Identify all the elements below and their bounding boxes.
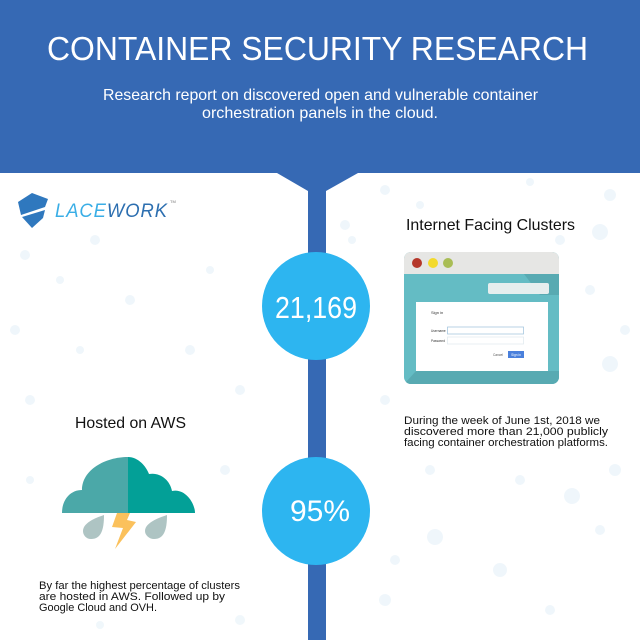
illustration: login window: [404, 252, 559, 384]
window buttons: [412, 258, 453, 268]
text: internet facing description: [404, 415, 609, 449]
subtitle: orchestration panels in the cloud.: [202, 105, 438, 122]
stat circle: 95%: [262, 457, 370, 565]
title: CONTAINER SECURITY RESEARCH: [47, 30, 588, 67]
text: AWS description: By far the highest percentage of clusters: [39, 580, 241, 592]
stat circle: 21,169: 21,169: [275, 290, 357, 325]
sign-in form: Sign in: [511, 353, 521, 357]
subtitle: [103, 87, 539, 122]
subtitle: Research report on discovered open and vulnerable container: [103, 87, 539, 104]
sign-in form: Password: [431, 339, 445, 343]
heading: Hosted on AWS: Hosted on AWS: [75, 415, 186, 432]
logo: Lacework: TM: [170, 199, 176, 204]
text: AWS description: Google Cloud and OVH.: [39, 602, 157, 614]
text: internet facing description: discovered more than 21,000 publicly: [404, 426, 609, 438]
sign-in form: Cancel: [493, 353, 503, 357]
stat circle: 21,169: [262, 252, 370, 360]
timeline stem: [308, 185, 326, 640]
stat circle: 95%: 95%: [290, 495, 350, 528]
sign-in form: Username: [431, 329, 446, 333]
sign-in form: Sign in: [431, 310, 443, 315]
text: internet facing description: During the week of June 1st, 2018 we: [404, 415, 600, 427]
icon: shield: [18, 193, 48, 228]
text: AWS description: [39, 580, 241, 614]
heading: Internet Facing Clusters: Internet Facing Clusters: [406, 217, 575, 234]
raindrops: [83, 515, 167, 539]
logo: Lacework: LACEWORK: [55, 200, 168, 222]
sign-in form: [416, 302, 548, 371]
text: internet facing description: facing container orchestration platforms.: [404, 437, 608, 449]
logo: Lacework: [18, 193, 176, 228]
icon: storm cloud: [62, 457, 195, 549]
text: AWS description: are hosted in AWS. Followed up by: [39, 591, 226, 603]
header banner: [0, 0, 640, 191]
lightning bolt: [112, 513, 136, 549]
